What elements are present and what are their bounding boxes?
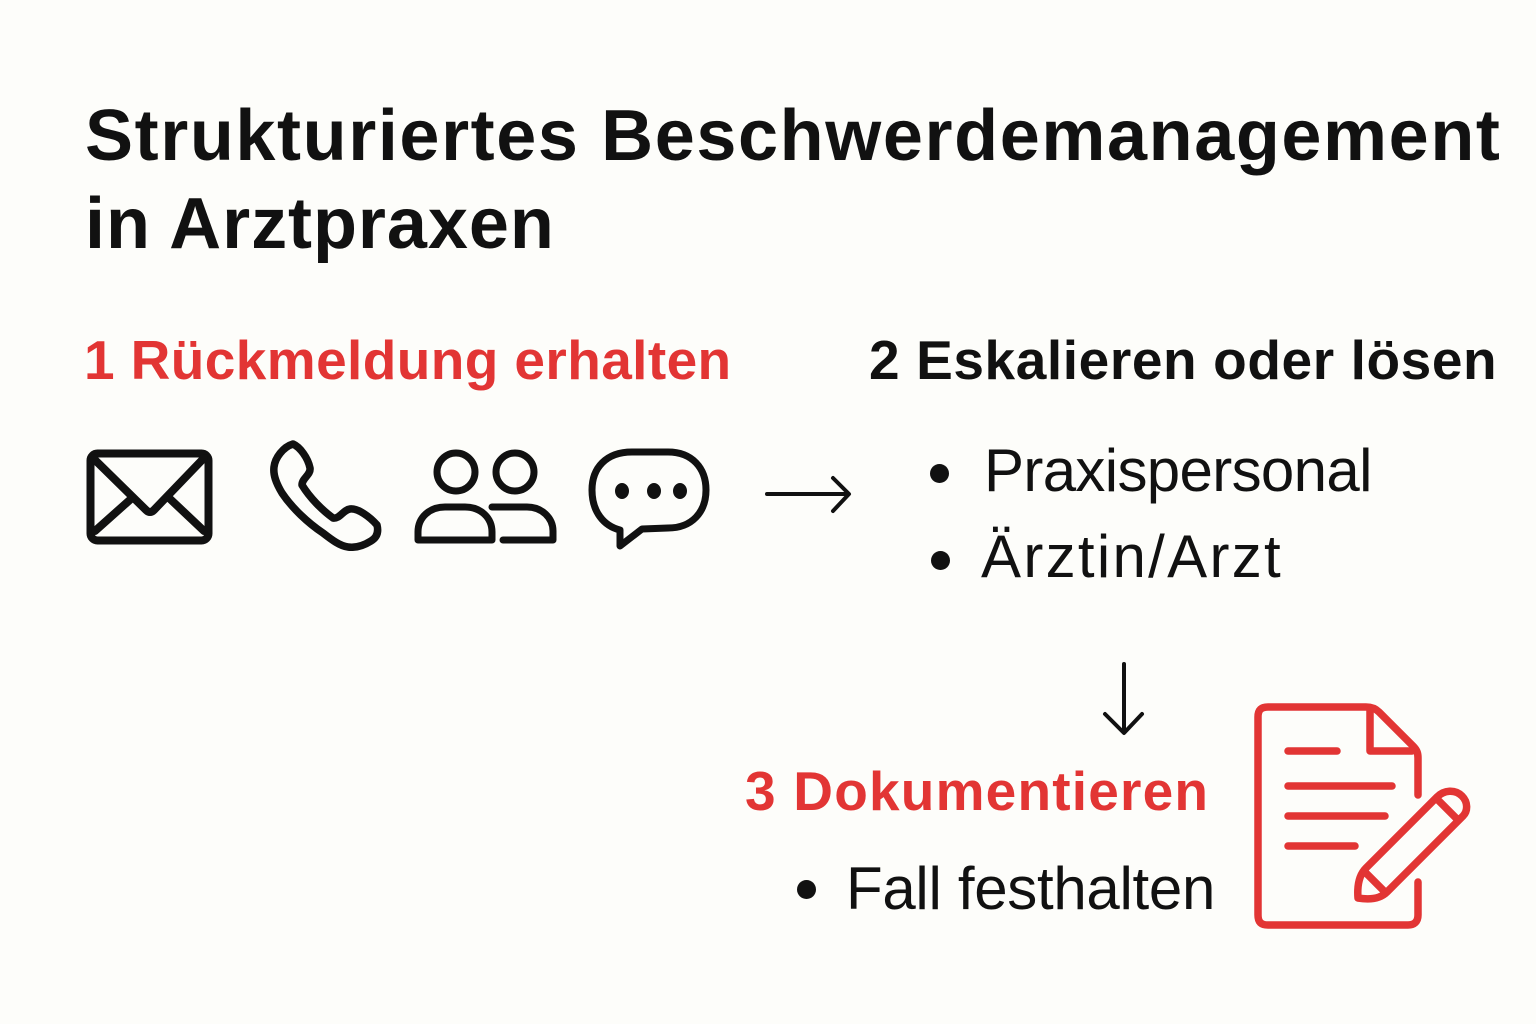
icon: chat bubble — [588, 448, 710, 550]
heading: step 3: 3 Dokumentieren — [745, 760, 1209, 822]
text: Fall festhalten: Fall festhalten — [846, 855, 1215, 922]
arrow: to step 3 — [1102, 662, 1144, 736]
bullet: Ärztin/Arzt — [931, 551, 950, 570]
list: step 2 — [930, 437, 1372, 590]
bullet: Fall festhalten — [797, 880, 816, 899]
icon: envelope — [86, 450, 212, 544]
arrow: to step 2 — [765, 476, 852, 514]
title: in Arztpraxen — [85, 184, 555, 264]
list: step 3 — [797, 855, 1215, 922]
icon: document with pencil — [1254, 703, 1470, 929]
text: Ärztin/Arzt: Ärztin/Arzt — [981, 523, 1283, 590]
icon: people — [414, 450, 556, 544]
icon: phone — [270, 440, 382, 551]
heading: step 1: 1 Rückmeldung erhalten — [84, 329, 732, 391]
heading: step 2: 2 Eskalieren oder lösen — [869, 329, 1497, 391]
title — [85, 96, 1501, 264]
text: Praxispersonal: Praxispersonal — [984, 437, 1372, 504]
title: Strukturiertes Beschwerdemanagement — [85, 96, 1501, 176]
bullet: Praxispersonal — [930, 464, 949, 483]
